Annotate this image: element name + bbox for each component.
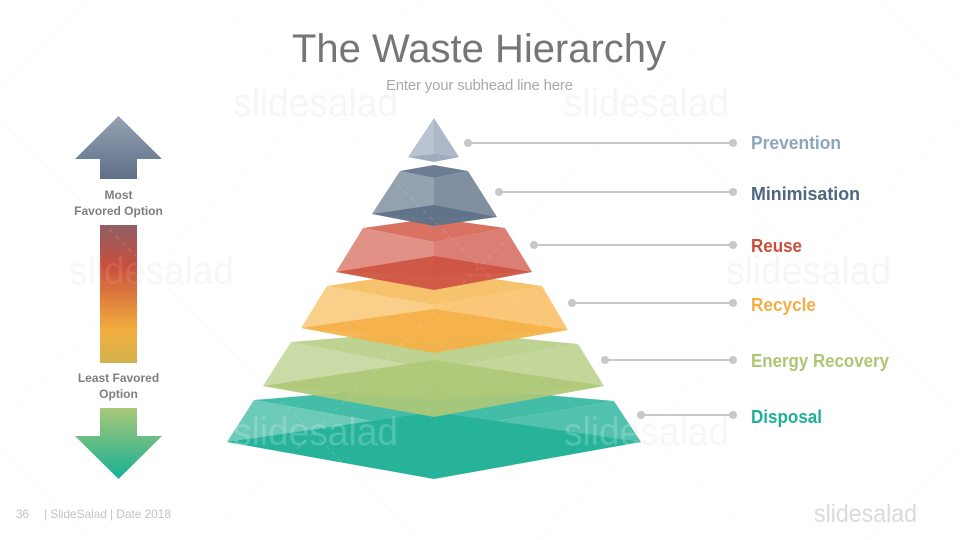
text: slidesalad: [564, 411, 729, 454]
left scale: favored to least favored: [74, 116, 163, 479]
subhead: Enter your subhead line here: [386, 77, 573, 94]
callout: recycle: [568, 299, 737, 307]
label: least favored option: Least Favored: [78, 371, 159, 385]
callout: prevention: [464, 139, 737, 147]
icon: down arrow: [75, 408, 162, 479]
label: most favored option: Most: [104, 188, 132, 202]
label: least favored option: Option: [99, 387, 138, 401]
callout: minimisation: [495, 188, 737, 196]
text: slidesalad: [69, 250, 234, 293]
callout lines: [464, 139, 737, 419]
text: slidesalad: [564, 82, 729, 125]
callout: reuse: [530, 241, 737, 249]
callout: disposal: [637, 411, 737, 419]
logo: slidesalad: [814, 500, 917, 528]
label: most favored option: Favored Option: [74, 204, 163, 218]
tier: disposal: [227, 385, 641, 479]
pyramid chart: [227, 118, 641, 479]
label: disposal: Disposal: [751, 406, 822, 427]
text: slidesalad: [233, 411, 398, 454]
footer: [16, 507, 171, 521]
gradient bar: [100, 225, 137, 363]
tier: minimisation: [372, 165, 497, 226]
title: The Waste Hierarchy: [292, 27, 666, 71]
tier: reuse: [336, 218, 532, 290]
tier labels: [751, 132, 890, 427]
tier: energy recovery: [263, 330, 604, 417]
label: energy recovery: Energy Recovery: [751, 350, 890, 371]
tier: prevention: [408, 118, 459, 162]
text: slidesalad: [233, 411, 398, 454]
text: slidesalad: [564, 411, 729, 454]
page number: 36: [16, 507, 29, 521]
text: slidesalad: [69, 250, 234, 293]
tier: recycle: [301, 270, 568, 353]
footer text: | SlideSalad | Date 2018: [44, 507, 171, 521]
label: recycle: Recycle: [751, 294, 816, 315]
label: minimisation: Minimisation: [751, 183, 860, 204]
icon: up arrow: [75, 116, 162, 179]
label: reuse: Reuse: [751, 235, 802, 256]
text: slidesalad: [233, 82, 398, 125]
label: prevention: Prevention: [751, 132, 841, 153]
callout: energy recovery: [601, 356, 737, 364]
text: slidesalad: [726, 250, 891, 293]
